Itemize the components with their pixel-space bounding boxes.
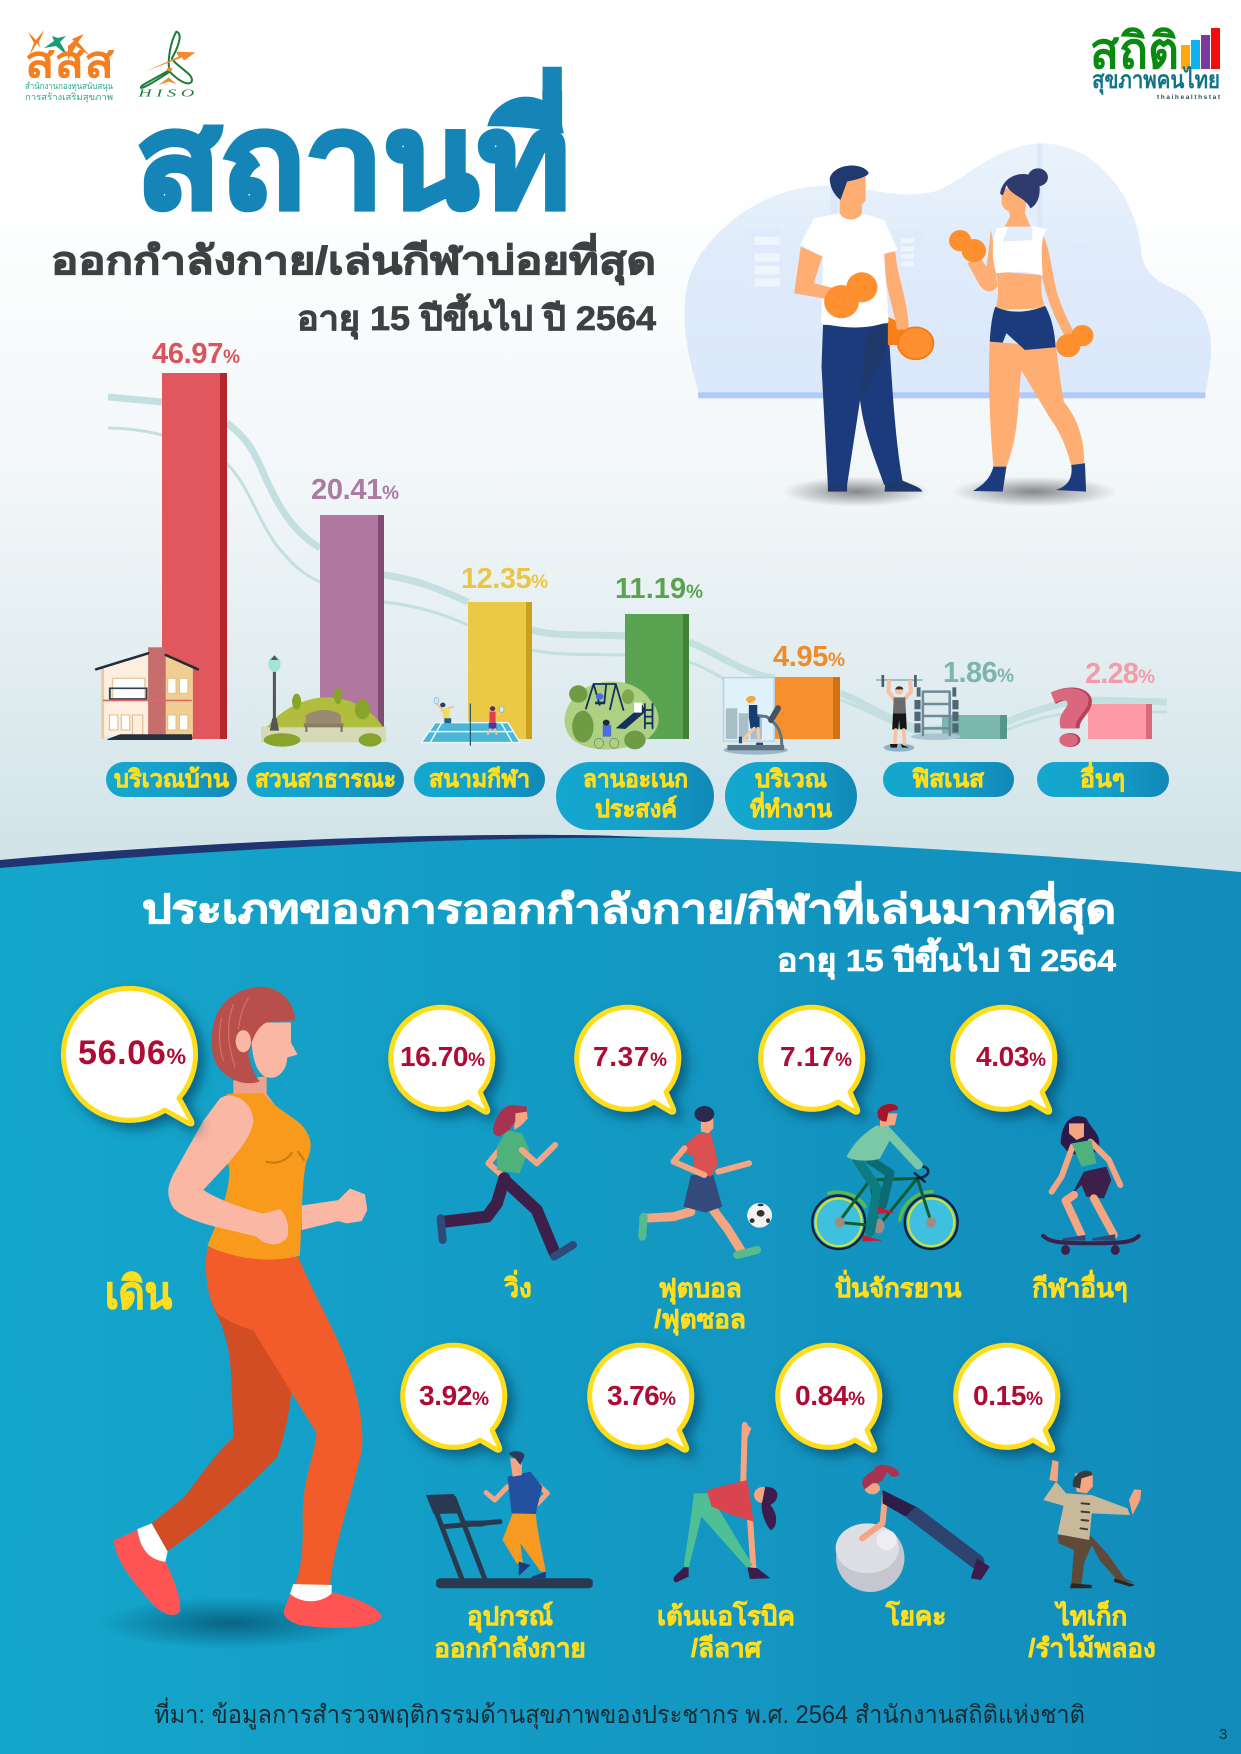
callout: walking 56.06%: 56.06% (78, 1034, 186, 1072)
callout: tai chi: 0.15% (973, 1380, 1043, 1411)
logo: health stat (1090, 23, 1221, 101)
bar values: 2.28% (1085, 658, 1155, 690)
icon: badminton court (421, 697, 520, 745)
label: stadium: สนามกีฬา (429, 766, 530, 793)
callout: running (391, 1007, 493, 1112)
icon: treadmill by window (724, 678, 788, 755)
callout: football: 7.37% (593, 1041, 667, 1072)
exercise labels: เต้นแอโรบิค (657, 1600, 795, 1631)
callout: cycling (761, 1007, 863, 1112)
bar values: 46.97% (152, 338, 240, 370)
logo: sss: สำนักงานกองทุนสนับสนุน (25, 81, 113, 92)
callout: walking 56.06% (63, 988, 195, 1124)
callout: aerobics (590, 1345, 692, 1450)
logo: sss (25, 30, 114, 103)
bar values: 1.86% (943, 657, 1014, 689)
callout: tai chi (956, 1345, 1058, 1450)
logo: sss: สสส (25, 38, 114, 87)
bar: public park (320, 515, 384, 739)
icon: yoga ball (836, 1465, 990, 1592)
callout: yoga (778, 1345, 880, 1450)
label: home: บริเวณบ้าน (114, 766, 230, 793)
label: fitness: ฟิสเนส (912, 766, 984, 793)
icon: treadmill runner (426, 1451, 593, 1588)
logo: HISO: H I S O (137, 87, 195, 99)
exercise labels: /ฟุตซอล (654, 1304, 746, 1336)
exercise labels: กีฬาอื่นๆ (1032, 1269, 1128, 1303)
icon: weightlifter and rack (877, 675, 961, 752)
logo: sss: การสร้างเสริมสุขภาพ (25, 92, 113, 103)
title: สถานที่ (136, 68, 570, 235)
bar: home (162, 373, 227, 739)
callout: cycling: 7.17% (780, 1041, 852, 1072)
exercise labels: ออกกำลังกาย (434, 1633, 586, 1663)
exercise labels: /รำไม้พลอง (1028, 1632, 1156, 1663)
subtitle: age and year: อายุ 15 ปีขึ้นไป ปี 2564 (297, 293, 656, 340)
bar: multipurpose yard (625, 614, 689, 739)
callout: equipment (403, 1345, 505, 1450)
label: others: อื่นๆ (1080, 761, 1125, 793)
subtitle: ออกกำลังกาย/เล่นกีฬาบ่อยที่สุด (51, 233, 656, 285)
exercise labels: วิ่ง (504, 1269, 532, 1303)
logo: health stat: สถิติ (1090, 23, 1179, 79)
icon: skateboarder (1043, 1116, 1139, 1255)
bar: stadium (468, 602, 532, 739)
label: multipurpose yard (556, 762, 714, 830)
label: fitness (883, 762, 1014, 797)
label: home (106, 762, 237, 797)
bar values: 20.41% (311, 474, 399, 506)
callout: aerobics: 3.76% (607, 1380, 676, 1411)
bar: workplace (775, 677, 840, 739)
icon: playground (565, 682, 659, 750)
label: walking: เดิน (105, 1269, 172, 1318)
label: multipurpose yard: ประสงค์ (595, 795, 677, 823)
page number: 3 (1219, 1726, 1227, 1743)
label: workplace: บริเวณ (755, 766, 827, 793)
icon: house (96, 647, 198, 740)
heading: exercise types: ประเภทของการออกกำลังกาย/กีฬาที่เล่นมากที่สุด (142, 881, 1116, 935)
icon: park (261, 655, 386, 747)
lower blue section (0, 835, 1241, 1754)
bar values (152, 338, 1155, 690)
callout: other sports (953, 1007, 1055, 1112)
logo: health stat: สุขภาพคนไทย (1092, 65, 1220, 96)
illustration: couple with dumbbells (684, 143, 1211, 507)
exercise labels: อุปกรณ์ (467, 1601, 553, 1633)
bar values: 11.19% (615, 573, 703, 605)
callout: other sports: 4.03% (976, 1041, 1046, 1072)
exercise labels: ไทเก็ก (1054, 1600, 1127, 1631)
woman (949, 168, 1093, 492)
icon: tai chi man (1043, 1460, 1141, 1588)
exercise labels: ปั่นจักรยาน (835, 1269, 962, 1303)
callout: yoga: 0.84% (795, 1380, 865, 1411)
icon: football player (642, 1106, 772, 1255)
bar: fitness (942, 715, 1007, 739)
bar values: 12.35% (461, 563, 548, 595)
icon: runner (441, 1105, 573, 1257)
bar: others (1088, 704, 1152, 739)
label: public park: สวนสาธารณะ (255, 766, 396, 793)
source note: ที่มา: ข้อมูลการสำรวจพฤติกรรมด้านสุขภาพของประชากร พ.ศ. 2564 สำนักงานสถิติแห่งชาติ (154, 1697, 1085, 1730)
label: workplace: ที่ทำงาน (750, 791, 833, 823)
label: stadium (414, 762, 545, 797)
logo: health stat: thaihealthstat (1157, 94, 1221, 101)
exercise labels: โยคะ (885, 1600, 946, 1631)
exercise labels (434, 1269, 1156, 1663)
callout: football (577, 1007, 679, 1112)
callout: equipment: 3.92% (419, 1380, 489, 1411)
heading: age and year: อายุ 15 ปีขึ้นไป ปี 2564 (777, 937, 1117, 980)
logo: HISO (137, 32, 196, 99)
bar chart: places (162, 373, 1152, 739)
decorative curve lines (108, 397, 1167, 735)
bar values: 4.95% (773, 641, 845, 673)
label: others (1037, 761, 1169, 797)
illustration: walking woman (97, 987, 382, 1649)
man (794, 166, 933, 492)
exercise labels: ฟุตบอล (658, 1273, 742, 1305)
icon: cyclist (812, 1104, 958, 1249)
label: multipurpose yard: ลานอะเนก (583, 766, 688, 793)
exercise labels: /ลีลาศ (691, 1633, 762, 1663)
page background (0, 0, 1241, 900)
category labels (106, 761, 1169, 830)
icon: aerobics woman (674, 1422, 777, 1583)
callout: running: 16.70% (400, 1041, 485, 1072)
label: workplace (725, 762, 857, 830)
icon: question mark (1051, 687, 1092, 747)
